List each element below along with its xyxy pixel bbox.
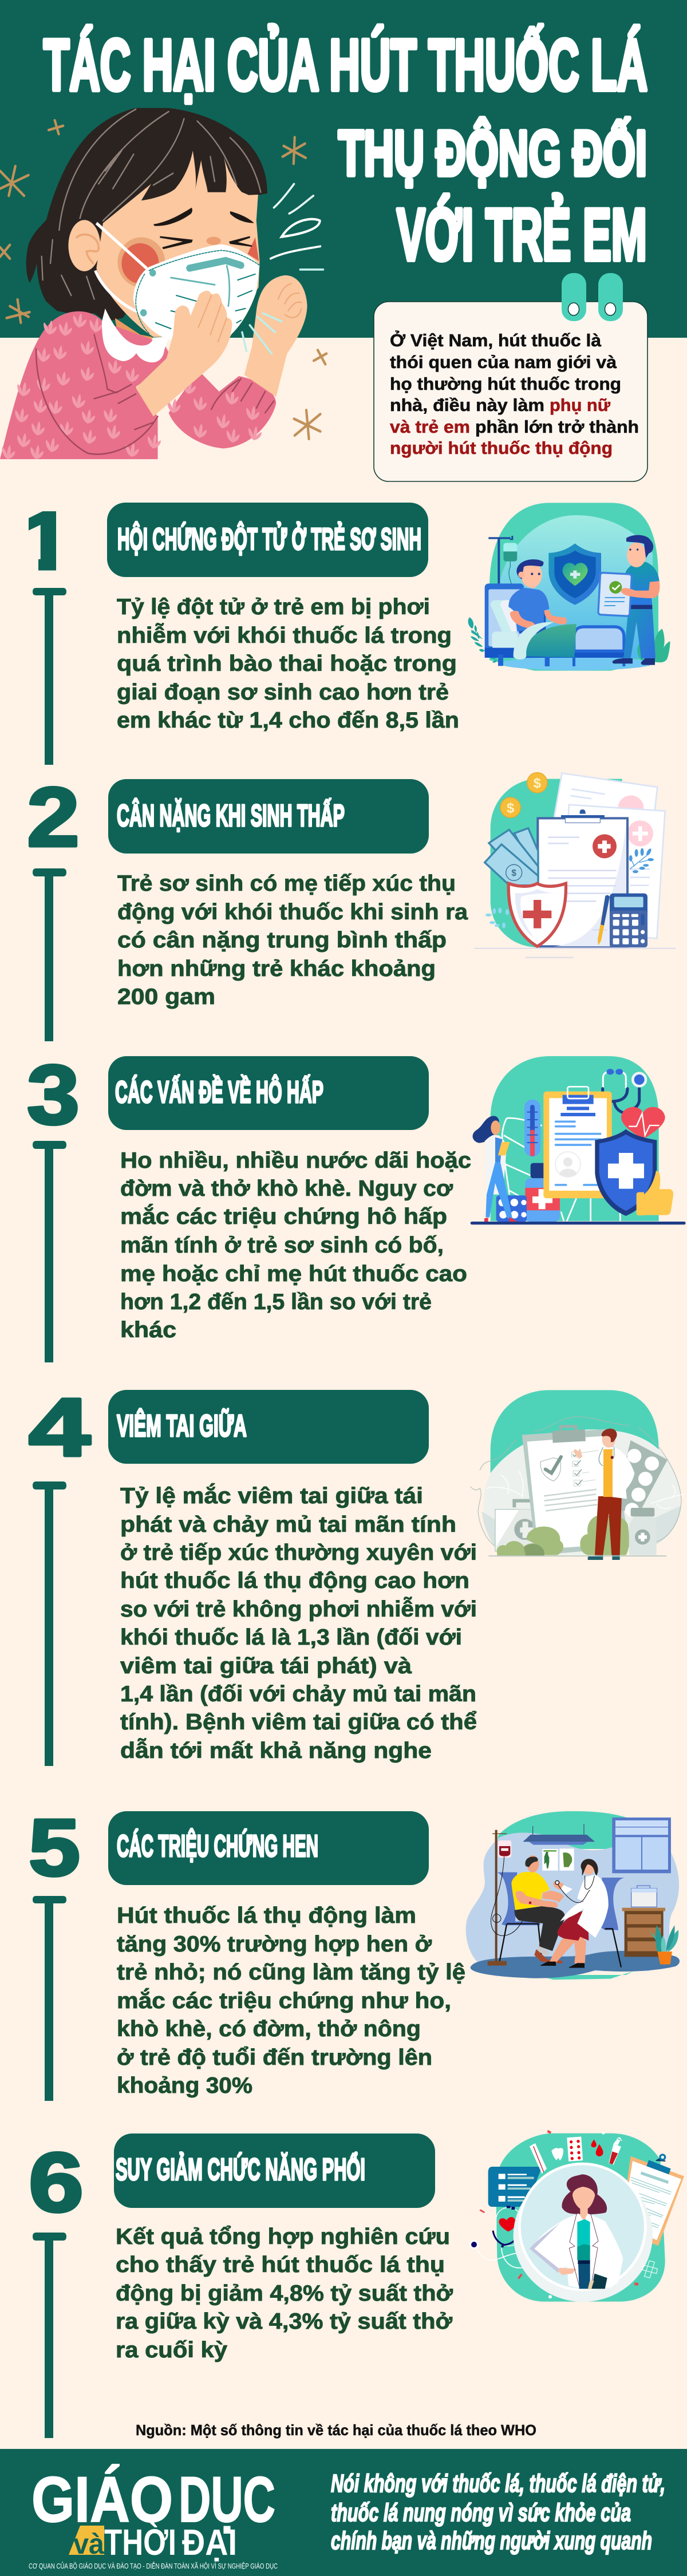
number 5: 5	[29, 1802, 80, 1893]
intro text: phụ nữ	[550, 395, 611, 415]
bandage	[642, 2261, 657, 2278]
text block 2: 200 gam	[117, 985, 215, 1009]
text block 6: Kết quả tổng hợp nghiên cứu	[116, 2225, 450, 2249]
heading 6: SUY GIẢM CHỨC NĂNG PHỔI	[116, 2152, 365, 2187]
heading 4: VIÊM TAI GIỮA	[117, 1408, 247, 1443]
illustration: medical insurance	[474, 773, 676, 958]
illustration: doctor and checklist	[471, 1390, 685, 1560]
panel: section 4	[29, 1381, 685, 1766]
illustration: doctor, clipboard, shield	[471, 1056, 686, 1224]
ground lines	[474, 949, 676, 958]
thumbs up	[637, 1171, 673, 1215]
panel: section 5	[29, 1802, 680, 2101]
fist	[244, 275, 307, 397]
panel: header band	[0, 0, 687, 338]
logo: GIÁO	[31, 2464, 173, 2535]
text block 3: mắc các triệu chứng hô hấp	[120, 1204, 447, 1229]
pill blister	[620, 1440, 668, 1517]
back papers	[550, 773, 665, 938]
text block 4	[120, 1483, 477, 1763]
text block 5: khoảng 30%	[117, 2073, 252, 2098]
text block 2	[117, 871, 468, 1009]
blanket	[514, 622, 577, 659]
ground line	[471, 1222, 686, 1224]
mask details	[136, 250, 259, 333]
hair	[26, 108, 267, 322]
panel: section 6	[29, 2130, 684, 2438]
doctor portrait	[530, 2174, 623, 2289]
stethoscope	[603, 1070, 639, 1113]
title	[44, 25, 647, 276]
timeline stem 6	[33, 2233, 66, 2438]
eyebrows and eyes	[153, 208, 254, 249]
text block 6: ra giữa kỳ và 4,3% tỷ suất thở	[116, 2309, 452, 2334]
text block 2: Trẻ sơ sinh có mẹ tiếp xúc thụ	[117, 871, 456, 896]
window	[612, 1818, 671, 1873]
number 1: 1	[17, 496, 77, 587]
mask straps	[95, 223, 151, 313]
shield	[508, 883, 566, 946]
timeline stem 1	[33, 588, 66, 765]
panel: footer	[0, 2449, 687, 2576]
bottle	[525, 1163, 560, 1222]
pills and sparkles	[479, 2131, 638, 2298]
finger lines	[198, 283, 301, 342]
circle portrait	[519, 2164, 645, 2290]
sweater pattern	[2, 313, 262, 459]
number 2: 2	[27, 771, 80, 864]
nurse	[598, 535, 660, 665]
clipboard	[543, 1086, 612, 1198]
floor	[500, 657, 653, 670]
text block 3: khác	[120, 1318, 176, 1342]
doctor	[540, 1859, 609, 1968]
text block 5: khò khè, có đờm, thở nông	[117, 2017, 421, 2041]
intro text: nhà, điều này làm	[390, 395, 544, 415]
coins: $	[534, 776, 541, 791]
panel: section 1	[17, 496, 670, 765]
text block 4: khói thuốc lá là 1,3 lần (đối với	[120, 1625, 462, 1650]
intro text: Ở Việt Nam, hút thuốc là	[390, 330, 602, 350]
text block 6: ra cuối kỳ	[116, 2338, 227, 2362]
doctor figure	[473, 1116, 517, 1222]
logo: THỜI	[104, 2522, 176, 2563]
inner gradient blob	[499, 515, 653, 658]
thermometer	[524, 1100, 540, 1157]
heading 3	[108, 1056, 429, 1130]
text block 3	[120, 1148, 471, 1342]
clipboard	[522, 1427, 630, 1555]
posters	[542, 1848, 574, 1871]
illustration: patient and nurse	[468, 503, 670, 671]
text block 4: hút thuốc lá thụ động cao hơn	[120, 1568, 469, 1593]
text block 5	[117, 1903, 465, 2098]
patient	[508, 559, 567, 634]
illustration: female doctor in circle	[470, 2130, 684, 2302]
card with list	[488, 2167, 542, 2207]
text block 4: phát và chảy mủ tai mãn tính	[120, 1512, 456, 1537]
calculator	[610, 894, 647, 947]
ground line	[488, 1555, 666, 1556]
text block 2: động với khói thuốc khi sinh ra	[117, 900, 468, 924]
chairs	[497, 1872, 625, 1967]
heading 2	[108, 779, 429, 854]
stethoscope chest piece	[633, 1073, 646, 1086]
backdrop blob	[491, 779, 622, 947]
pale blob shade	[482, 1506, 681, 1550]
pale blue room	[466, 1833, 679, 1971]
ear	[68, 220, 100, 271]
text block 3: đờm và thở khò khè. Nguy cơ	[120, 1176, 453, 1201]
mask	[133, 244, 259, 340]
heading 6	[114, 2134, 435, 2208]
text block 4: dẫn tới mất khả năng nghe	[120, 1738, 432, 1763]
heading 4	[108, 1390, 429, 1464]
ceiling lamp	[523, 1824, 595, 1845]
text block 2: hơn những trẻ khác khoảng	[117, 957, 436, 981]
panel: intro card	[374, 273, 647, 481]
heart icon	[621, 1107, 665, 1139]
leaf outlines	[502, 1118, 620, 1221]
bushes	[497, 1515, 629, 1555]
panel: section 2	[27, 771, 676, 1041]
intro text: và trẻ em	[390, 417, 470, 437]
medical icons row	[530, 2130, 622, 2174]
text block 3: hơn 1,2 đến 1,5 lần so với trẻ	[120, 1290, 432, 1314]
backdrop blob	[489, 503, 658, 671]
text block 4: 1,4 lần (đối với chảy mủ tai mãn	[120, 1682, 476, 1706]
card background	[374, 302, 647, 481]
floor	[471, 1951, 680, 1978]
pale sprig	[485, 908, 509, 929]
timeline stem 4	[33, 1481, 66, 1766]
neck	[115, 318, 152, 346]
icon: quote pills	[562, 273, 623, 321]
heading 3: CÁC VẤN ĐỀ VỀ HÔ HẤP	[115, 1074, 323, 1109]
cabinet	[622, 1908, 665, 1957]
text block 6	[116, 2225, 453, 2362]
coins: $	[507, 800, 514, 816]
shield icon	[548, 543, 601, 605]
collar	[102, 309, 169, 362]
logo: CƠ QUAN CỦA BỘ GIÁO DỤC VÀ ĐÀO TẠO - DIỄN ĐÀN TOÀN XÃ HỘI VÌ SỰ NGHIỆP GIÁO DỤC	[29, 2562, 278, 2570]
heading 1: HỘI CHỨNG ĐỘT TỬ Ở TRẺ SƠ SINH	[117, 521, 421, 556]
illustration: coughing girl with mask	[0, 108, 326, 459]
text block 1: em khác từ 1,4 cho đến 8,5 lần	[117, 708, 459, 733]
intro text: họ thường hút thuốc trong	[390, 374, 621, 394]
clipboard	[620, 2154, 684, 2246]
text block 3: Ho nhiều, nhiều nước dãi hoặc	[120, 1148, 471, 1173]
thin contour	[471, 1417, 681, 1547]
pale blob	[484, 1429, 680, 1555]
pen	[598, 895, 610, 946]
shield icon	[595, 1129, 657, 1216]
logo: và	[73, 2528, 104, 2560]
panel: section 3	[27, 1048, 686, 1362]
text block 5: ở trẻ độ tuổi đến trường lên	[117, 2045, 432, 2070]
logo: ĐẠI	[182, 2522, 237, 2563]
text block 4: viêm tai giữa tái phát) và	[120, 1654, 412, 1678]
text block 3: mãn tính ở trẻ sơ sinh có bố,	[120, 1233, 444, 1258]
sweater	[0, 311, 173, 459]
source note: Nguồn: Một số thông tin về tác hại của thuốc lá theo WHO	[136, 2421, 536, 2439]
stethoscope	[470, 2206, 530, 2268]
sweater seams	[36, 334, 274, 455]
text block 6: cho thấy trẻ hút thuốc lá thụ	[116, 2253, 445, 2277]
text block 1: Tỷ lệ đột tử ở trẻ em bị phơi	[117, 595, 430, 619]
text block 4: Tỷ lệ mắc viêm tai giữa tái	[120, 1483, 423, 1508]
illustration: doctor examining patient	[466, 1811, 680, 1980]
text block 2: có cân nặng trung bình thấp	[117, 928, 447, 953]
text block 4: tính). Bệnh viêm tai giữa có thể	[120, 1710, 477, 1735]
timeline stem 3	[33, 1141, 66, 1362]
text block 1: quá trình bào thai hoặc trong	[117, 651, 457, 676]
text block 5: trẻ nhỏ; nó cũng làm tăng tỷ lệ	[117, 1960, 465, 1985]
sneeze marks	[242, 184, 323, 354]
logo: DỤC	[179, 2464, 275, 2535]
number 3: 3	[27, 1048, 80, 1142]
bed	[485, 583, 626, 666]
banknotes: $	[511, 868, 516, 878]
hand over mask	[136, 291, 232, 417]
heading 5	[108, 1811, 429, 1885]
text block 5: tăng 30% trường hợp hen ở	[117, 1932, 432, 1957]
coins	[500, 773, 547, 817]
timeline stem 5	[33, 1896, 66, 2101]
text block 3: mẹ hoặc chỉ mẹ hút thuốc cao	[120, 1262, 467, 1286]
intro text: thói quen của nam giới và	[390, 352, 617, 372]
backdrop blob	[496, 2134, 665, 2302]
text block 1: giai đoạn sơ sinh cao hơn trẻ	[117, 680, 449, 705]
banknotes	[485, 828, 538, 886]
mask buttons	[140, 270, 156, 317]
text block 1: nhiễm với khói thuốc lá trong	[117, 623, 452, 648]
footer slogan	[331, 2470, 665, 2555]
number 6: 6	[29, 2136, 84, 2230]
heading 2: CÂN NẶNG KHI SINH THẤP	[117, 798, 345, 833]
number 4: 4	[29, 1381, 90, 1473]
patient	[511, 1855, 565, 1963]
cheek blush inner	[121, 243, 159, 283]
pill pack	[496, 1195, 527, 1222]
backdrop blob	[491, 1056, 659, 1221]
sweater sleeve	[169, 370, 276, 448]
medical kit	[631, 1886, 657, 1907]
teal blob	[496, 1811, 635, 1980]
text block 1	[117, 595, 459, 733]
plants	[468, 617, 670, 663]
IV stand	[488, 1830, 530, 1966]
leaf outlines	[487, 1471, 685, 1508]
intro text: người hút thuốc thụ động	[390, 438, 613, 458]
heading 5: CÁC TRIỆU CHỨNG HEN	[117, 1828, 318, 1863]
intro text	[390, 330, 639, 458]
nose	[207, 237, 221, 245]
text block 6: động bị giảm 4,8% tỷ suất thở	[116, 2281, 453, 2306]
doctor figure	[574, 1429, 634, 1560]
blue sprig	[629, 848, 654, 873]
text block 5: mắc các triệu chứng như ho,	[117, 1988, 451, 2013]
IV stand	[488, 536, 517, 584]
circle stack	[514, 2169, 653, 2302]
icon: decorative stars	[0, 120, 326, 439]
text block 4: so với trẻ không phơi nhiễm với	[120, 1597, 477, 1622]
potted plant	[649, 1925, 678, 1965]
footer band	[0, 2449, 687, 2576]
cheek blush	[118, 238, 165, 287]
logo	[29, 2464, 278, 2570]
heading 1	[107, 503, 428, 577]
hair highlights	[42, 109, 260, 299]
intro text: phần lớn trở thành	[475, 417, 639, 437]
right cheek	[247, 238, 259, 261]
bottle	[629, 1508, 657, 1555]
face	[96, 151, 259, 337]
text block 5: Hút thuốc lá thụ động làm	[117, 1903, 416, 1928]
clipboard	[538, 809, 627, 946]
medicine case	[495, 1501, 537, 1551]
backdrop blob	[491, 1390, 659, 1554]
text block 4: ở trẻ tiếp xúc thường xuyên với	[120, 1540, 477, 1565]
timeline stem 2	[33, 868, 66, 1041]
